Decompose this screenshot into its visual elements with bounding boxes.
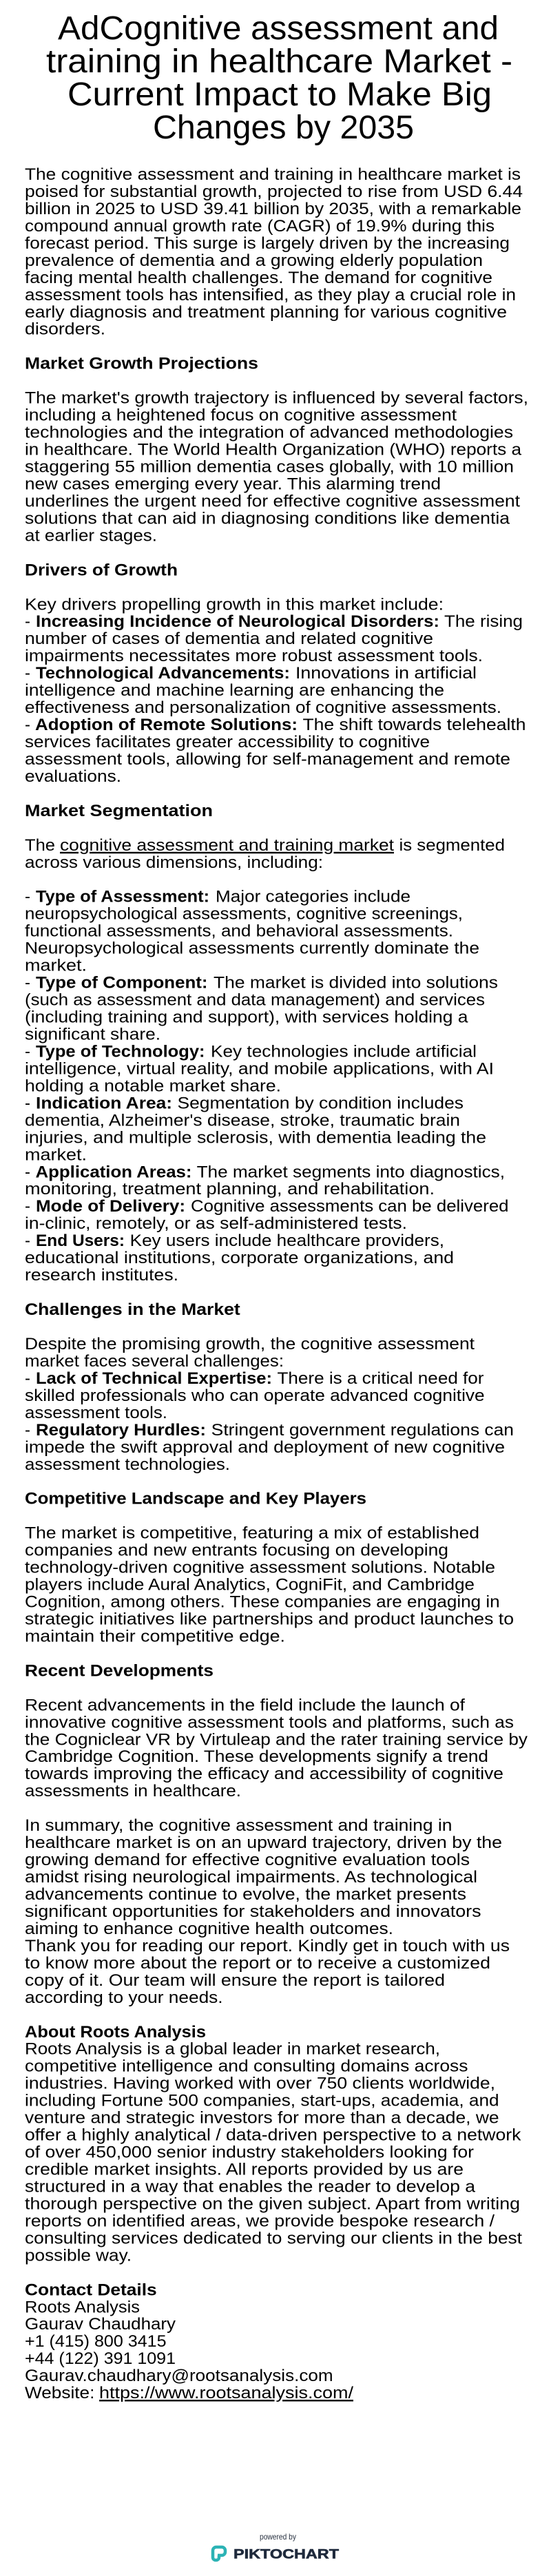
- text block: application areas: monitoring, treatment planning, and rehabilitation.: [25, 1180, 435, 1198]
- text block: summary: growing demand for effective cognitive evaluation tools: [25, 1851, 470, 1869]
- text block: about: of over 450,000 senior industry stakeholders looking for: [25, 2143, 474, 2162]
- text block: key drivers list: -: [25, 612, 30, 631]
- text block: key drivers list: Increasing Incidence of Neurological Disorders:: [36, 612, 439, 631]
- text block: competitive landscape: [25, 1524, 514, 1646]
- section: contact details: [25, 2281, 353, 2402]
- section: competitive landscape and key players: [25, 1490, 514, 1646]
- section: market segmentation: [25, 802, 508, 1285]
- text block: about: reports on identified areas, we provide bespoke research /: [25, 2212, 495, 2230]
- text block: mode of delivery: in-clinic, remotely, or as self-administered tests.: [25, 1214, 407, 1233]
- text block: contact information: https://www.rootsanalysis.com/: [99, 2384, 353, 2402]
- text block: challenges: skilled professionals who can operate advanced cognitive: [25, 1386, 485, 1405]
- text block: key drivers list: intelligence and machine learning are enhancing the: [25, 681, 444, 700]
- text block: indication area: dementia, Alzheimer's disease, stroke, traumatic brain: [25, 1111, 460, 1130]
- title: Changes by 2035: [153, 110, 414, 146]
- text block: challenges: Lack of Technical Expertise:: [36, 1369, 272, 1388]
- text block: challenges: impede the swift approval and deployment of new cognitive: [25, 1438, 505, 1457]
- text block: type of technology: -: [25, 1043, 30, 1061]
- text block: contact information: Gaurav Chaudhary: [25, 2315, 176, 2334]
- text block: application areas: Application Areas:: [36, 1163, 191, 1181]
- text block: mode of delivery: [25, 1197, 508, 1233]
- text block: segmentation intro with link: across various dimensions, including:: [25, 853, 323, 872]
- text block: key drivers list: services facilitates greater accessibility to cognitive: [25, 733, 430, 751]
- text block: recent advancements: assessments in healthcare.: [25, 1782, 241, 1800]
- section: drivers of growth: [25, 561, 526, 786]
- text block: key drivers list: evaluations.: [25, 767, 121, 786]
- text block: contact information: +44 (122) 391 1091: [25, 2349, 176, 2368]
- text block: introduction: compound annual growth rate (CAGR) of 19.9% during this: [25, 217, 495, 236]
- heading: contact details: Contact Details: [25, 2281, 157, 2299]
- text block: type of assessment: Type of Assessment:: [36, 888, 209, 906]
- text block: about: offer a highly analytical / data-driven perspective to a network: [25, 2126, 522, 2145]
- text block: about: thorough perspective on the given subject. Apart from writing: [25, 2194, 520, 2214]
- heading: market growth projections: Market Growth Projections: [25, 355, 258, 373]
- text block: type of component: (such as assessment and data management) and services: [25, 991, 485, 1010]
- text block: segmentation intro with link: cognitive assessment and training market: [60, 836, 394, 855]
- text block: challenges: There is a critical need for: [277, 1369, 484, 1388]
- text block: challenges: assessment tools.: [25, 1404, 167, 1422]
- text block: introduction: early diagnosis and treatment planning for various cognitive: [25, 303, 507, 322]
- text block: key drivers list: [25, 595, 526, 786]
- text block: challenges: Regulatory Hurdles:: [36, 1421, 206, 1440]
- text block: type of assessment: market.: [25, 957, 87, 975]
- text block: growth trajectory: at earlier stages.: [25, 526, 157, 545]
- text block: application areas: The market segments into diagnostics,: [197, 1163, 505, 1181]
- text: powered by: powered by: [260, 2532, 296, 2542]
- text block: about: industries. Having worked with over 750 clients worldwide,: [25, 2075, 495, 2093]
- footer: powered by piktochart: [213, 2532, 339, 2562]
- text block: introduction: forecast period. This surge is largely driven by the increasing: [25, 234, 510, 253]
- text block: about: including Fortune 500 companies, start-ups, academia, and: [25, 2092, 499, 2110]
- text block: summary: amidst rising neurological impairments. As technological: [25, 1868, 477, 1887]
- text block: challenges: [25, 1335, 514, 1474]
- text block: challenges: assessment technologies.: [25, 1455, 230, 1474]
- text block: type of technology: Key technologies include artificial: [211, 1043, 477, 1061]
- heading: about roots analysis: About Roots Analysis: [25, 2023, 206, 2042]
- text block: segmentation intro with link: The: [25, 836, 55, 855]
- text block: application areas: [25, 1163, 505, 1198]
- text block: competitive landscape: technology-driven cognitive assessment solutions. Notable: [25, 1559, 495, 1577]
- text block: introduction: prevalence of dementia and a growing elderly population: [25, 251, 483, 270]
- text block: competitive landscape: The market is competitive, featuring a mix of established: [25, 1524, 479, 1543]
- text block: summary: aiming to enhance cognitive health outcomes.: [25, 1920, 393, 1938]
- text block: thank you note: to know more about the report or to receive a customized: [25, 1954, 490, 1973]
- text block: competitive landscape: Cognition, among others. These companies are engaging in: [25, 1592, 500, 1612]
- text block: thank you note: [25, 1937, 510, 2007]
- text block: type of component: Type of Component:: [36, 974, 208, 993]
- text block: segmentation intro with link: [25, 836, 505, 872]
- text block: thank you note: according to your needs.: [25, 1988, 223, 2007]
- text block: recent advancements: towards improving the efficacy and accessibility of cognitive: [25, 1765, 503, 1783]
- title: Current Impact to Make Big: [67, 76, 492, 113]
- text block: competitive landscape: maintain their competitive edge.: [25, 1627, 285, 1646]
- text block: challenges: Despite the promising growth, the cognitive assessment: [25, 1335, 475, 1353]
- heading: challenges in the market: Challenges in the Market: [25, 1300, 240, 1319]
- text block: indication area: -: [25, 1094, 30, 1112]
- text block: end users: End Users:: [36, 1232, 125, 1250]
- text block: type of assessment: Major categories include: [216, 888, 410, 906]
- text block: introduction: billion in 2025 to USD 39.41 billion by 2035, with a remarkable: [25, 200, 521, 218]
- text block: thank you note: Thank you for reading our report. Kindly get in touch with us: [25, 1937, 510, 1955]
- text block: introduction: poised for substantial growth, projected to rise from USD 6.44: [25, 183, 523, 201]
- text block: key drivers list: The shift towards telehealth: [303, 716, 526, 734]
- heading: competitive landscape and key players: Competitive Landscape and Key Players: [25, 1490, 366, 1508]
- text block: competitive landscape: companies and new entrants focusing on developing: [25, 1541, 448, 1560]
- text block: growth trajectory: in healthcare. The World Health Organization (WHO) reports a: [25, 441, 522, 459]
- text block: about: credible market insights. All reports provided by us are: [25, 2160, 464, 2179]
- heading: recent developments: Recent Developments: [25, 1661, 214, 1680]
- text block: application areas: -: [25, 1163, 30, 1181]
- text block: type of technology: Type of Technology:: [36, 1043, 205, 1061]
- text block: recent advancements: the Cogniclear VR by Virtuleap and the rater training service by: [25, 1730, 528, 1749]
- text block: end users: educational institutions, corporate organizations, and: [25, 1249, 454, 1267]
- text block: type of component: -: [25, 974, 30, 993]
- text block: indication area: Segmentation by condition includes: [178, 1094, 464, 1112]
- text block: introduction: assessment tools has intensified, as they play a crucial role in: [25, 286, 516, 304]
- text block: type of component: The market is divided into solutions: [214, 974, 498, 993]
- text block: growth trajectory: staggering 55 million dementia cases globally, with 10 million: [25, 457, 514, 477]
- text block: challenges: -: [25, 1421, 30, 1440]
- title: AdCognitive assessment and: [58, 10, 499, 47]
- text block: indication area: injuries, and multiple sclerosis, with dementia leading the: [25, 1128, 486, 1147]
- text block: contact information: Website:: [25, 2384, 94, 2402]
- title: training in healthcare Market -: [46, 43, 512, 80]
- text block: introduction: disorders.: [25, 320, 105, 339]
- text block: introduction: The cognitive assessment and training in healthcare market is: [25, 165, 521, 184]
- text block: summary: In summary, the cognitive assessment and training in: [25, 1816, 452, 1835]
- text block: introduction: facing mental health challenges. The demand for cognitive: [25, 269, 492, 287]
- text block: recent advancements: innovative cognitive assessment tools and platforms, such as: [25, 1713, 514, 1732]
- text block: challenges: market faces several challenges:: [25, 1352, 284, 1371]
- text block: mode of delivery: Mode of Delivery:: [36, 1197, 185, 1216]
- text block: recent advancements: Cambridge Cognition. These developments signify a trend: [25, 1747, 488, 1766]
- text block: competitive landscape: strategic initiatives like partnerships and product launches to: [25, 1610, 514, 1628]
- text block: type of component: significant share.: [25, 1025, 160, 1044]
- text block: recent advancements: [25, 1696, 528, 1800]
- text block: growth trajectory: including a heightened focus on cognitive assessment: [25, 406, 457, 425]
- text block: thank you note: copy of it. Our team will ensure the report is tailored: [25, 1971, 445, 1990]
- text block: summary: [25, 1816, 502, 1938]
- text block: key drivers list: number of cases of dementia and related cognitive: [25, 630, 433, 648]
- text block: indication area: [25, 1094, 486, 1164]
- text block: about: Roots Analysis is a global leader in market research,: [25, 2040, 440, 2059]
- text block: type of component: [25, 974, 498, 1044]
- text block: key drivers list: -: [25, 716, 30, 734]
- text block: contact information: [25, 2298, 353, 2402]
- text block: type of technology: holding a notable market share.: [25, 1077, 281, 1095]
- heading: drivers of growth: Drivers of Growth: [25, 561, 178, 579]
- text block: about: possible way.: [25, 2246, 132, 2265]
- title: [46, 10, 512, 146]
- section: about roots analysis: [25, 2023, 522, 2265]
- text block: growth trajectory: technologies and the integration of advanced methodologies: [25, 424, 513, 442]
- text block: contact information: Gaurav.chaudhary@rootsanalysis.com: [25, 2367, 333, 2385]
- text block: key drivers list: assessment tools, allowing for self-management and remote: [25, 750, 510, 769]
- text block: growth trajectory: new cases emerging every year. This alarming trend: [25, 475, 441, 493]
- section: recent developments: [25, 1661, 528, 2007]
- text block: indication area: Indication Area:: [36, 1094, 172, 1112]
- text block: type of assessment: functional assessments, and behavioral assessments.: [25, 922, 453, 941]
- text block: growth trajectory: [25, 389, 528, 545]
- text block: key drivers list: Key drivers propelling growth in this market include:: [25, 595, 444, 614]
- text: piktochart wordmark: PIKTOCHART: [233, 2547, 339, 2562]
- text block: key drivers list: -: [25, 664, 30, 683]
- heading: market segmentation: Market Segmentation: [25, 802, 213, 820]
- text block: challenges: Stringent government regulations can: [211, 1421, 514, 1440]
- section: challenges in the market: [25, 1300, 514, 1474]
- text block: key drivers list: The rising: [444, 612, 523, 631]
- text block: end users: -: [25, 1232, 30, 1250]
- text block: contact information: Roots Analysis: [25, 2298, 140, 2316]
- text block: growth trajectory: solutions that can aid in diagnosing conditions like dementia: [25, 509, 510, 528]
- text block: key drivers list: effectiveness and personalization of cognitive assessments.: [25, 698, 501, 717]
- text block: recent advancements: Recent advancements in the field include the launch of: [25, 1696, 465, 1714]
- text block: growth trajectory: underlines the urgent need for effective cognitive assessment: [25, 492, 520, 510]
- text block: about: consulting services dedicated to serving our clients in the best: [25, 2229, 522, 2247]
- text block: type of technology: [25, 1043, 494, 1095]
- text block: end users: Key users include healthcare providers,: [130, 1232, 444, 1250]
- text block: mode of delivery: Cognitive assessments can be delivered: [191, 1197, 508, 1216]
- text block: indication area: market.: [25, 1145, 87, 1164]
- text block: introduction: [25, 165, 523, 339]
- text block: about: structured in a way that enables the reader to develop a: [25, 2178, 476, 2196]
- text block: type of assessment: [25, 888, 479, 975]
- text block: about: [25, 2040, 522, 2265]
- text block: type of technology: intelligence, virtual reality, and mobile applications, with AI: [25, 1059, 494, 1078]
- text block: type of assessment: neuropsychological assessments, cognitive screenings,: [25, 905, 463, 924]
- section: market growth projections: [25, 355, 528, 545]
- text block: competitive landscape: players include Aural Analytics, CogniFit, and Cambridge: [25, 1576, 475, 1594]
- text block: key drivers list: Innovations in artificial: [295, 664, 477, 683]
- text block: key drivers list: Adoption of Remote Solutions:: [35, 716, 298, 734]
- text block: segmentation intro with link: is segmented: [399, 836, 505, 855]
- icon: piktochart logo: [213, 2547, 225, 2560]
- text block: end users: research institutes.: [25, 1266, 178, 1285]
- text block: key drivers list: Technological Advancements:: [36, 664, 290, 683]
- text block: summary: advancements continue to evolve, the market presents: [25, 1885, 466, 1904]
- text block: challenges: -: [25, 1369, 30, 1388]
- text block: about: venture and strategic investors for more than a decade, we: [25, 2109, 499, 2128]
- text block: growth trajectory: The market's growth trajectory is influenced by several factors,: [25, 389, 528, 408]
- text block: key drivers list: impairments necessitates more robust assessment tools.: [25, 647, 483, 665]
- text block: summary: significant opportunities for stakeholders and innovators: [25, 1902, 481, 1921]
- text block: summary: healthcare market is on an upward trajectory, driven by the: [25, 1834, 502, 1852]
- text block: type of assessment: Neuropsychological assessments currently dominate the: [25, 939, 479, 958]
- text block: contact information: +1 (415) 800 3415: [25, 2332, 167, 2351]
- text block: type of component: (including training and support), with services holding a: [25, 1008, 468, 1026]
- text block: about: competitive intelligence and consulting domains across: [25, 2057, 468, 2076]
- text block: mode of delivery: -: [25, 1197, 30, 1216]
- text block: type of assessment: -: [25, 888, 30, 906]
- text block: end users: [25, 1232, 454, 1285]
